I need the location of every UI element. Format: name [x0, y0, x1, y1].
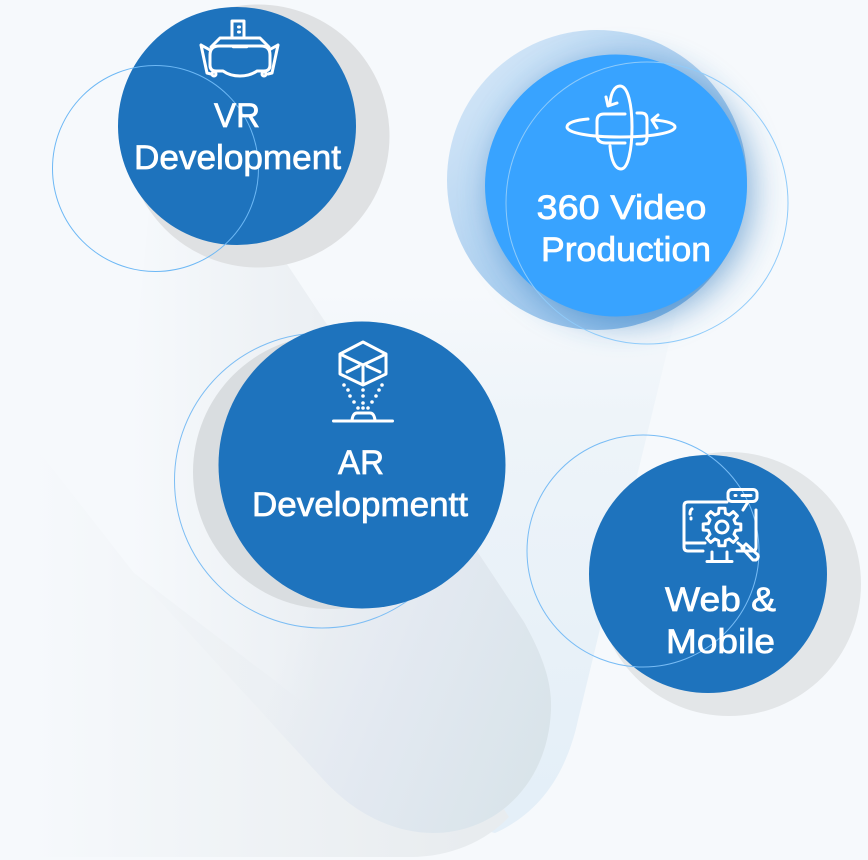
panel: AR Development: [174, 322, 506, 628]
label line 2: Production: [541, 231, 711, 269]
circle: [218, 322, 506, 608]
blurred glow: [491, 61, 753, 323]
circle shadow: [597, 452, 861, 716]
background shape: main rounded diagonal band: [250, 243, 551, 833]
icon: monitor with gear: [684, 490, 758, 562]
background shape: lower diagonal band: [30, 440, 509, 857]
label: AR: [338, 444, 384, 482]
label: 360 Video: [536, 189, 706, 227]
panel: 360 Video Production: [447, 30, 788, 344]
panel: Web and Mobile: [527, 435, 861, 716]
circle: [485, 54, 747, 316]
circle shadow: [193, 335, 467, 609]
label line 2: Development: [134, 139, 342, 177]
outline ring: [506, 62, 788, 344]
label: Web &: [665, 581, 776, 619]
outline ring: [52, 66, 258, 272]
outline ring: [527, 435, 759, 667]
glow halo: [447, 30, 747, 330]
label line 2: Mobile: [666, 623, 775, 661]
icon: 360 rotation: [567, 86, 675, 169]
label: VR: [214, 97, 260, 135]
background shape: pale blue band: [300, 280, 682, 833]
circle shadow: [126, 4, 390, 268]
background shape: upper band wash: [130, 200, 551, 833]
circle: [118, 7, 356, 245]
circle: [589, 455, 827, 693]
outline ring: [174, 333, 470, 628]
icon: VR headset: [201, 21, 278, 76]
icon: AR hologram cube: [334, 342, 392, 421]
panel: VR Development: [52, 4, 390, 272]
label line 2: Developmentt: [252, 486, 469, 524]
